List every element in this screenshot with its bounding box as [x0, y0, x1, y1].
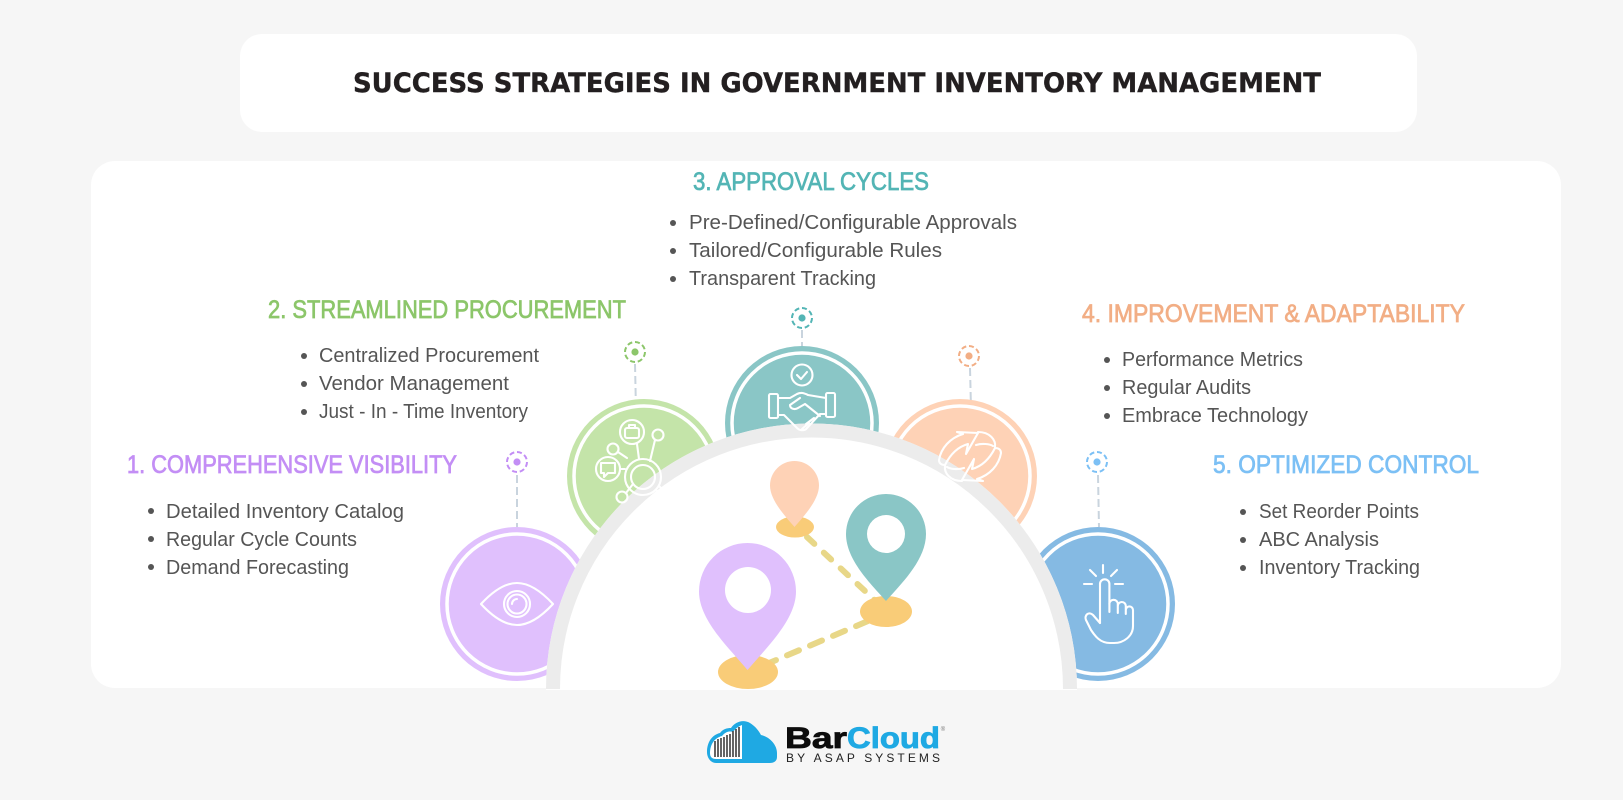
bullet list 1: Detailed Inventory Catalog: [166, 501, 404, 523]
marker: purple target and connector: [507, 452, 527, 527]
bullet list 2: Vendor Management: [319, 373, 509, 395]
bullet list 3: Transparent Tracking: [689, 268, 876, 290]
logo wordmark: Bar: [785, 722, 847, 755]
marker: blue target and connector: [1087, 452, 1107, 527]
icon: refresh arrows: [939, 432, 1001, 481]
logo tagline: BY ASAP SYSTEMS: [786, 751, 940, 765]
main panel background: [91, 161, 1561, 688]
logo: BarCloud: ®: [941, 726, 946, 733]
logo: BarCloud: Cloud: [847, 722, 940, 755]
circle: purple: [440, 527, 594, 681]
bullet list 1: Demand Forecasting: [166, 557, 349, 579]
map pin: purple: [699, 543, 796, 689]
bullet list 3: [670, 212, 1017, 290]
panel: 5 optimized control text: [1213, 451, 1479, 579]
icon: handshake with check: [769, 364, 835, 430]
central dome: [546, 423, 1077, 690]
title: SUCCESS STRATEGIES IN GOVERNMENT INVENTORY MANAGEMENT: [353, 68, 1322, 99]
logo: BarCloud: [707, 721, 946, 765]
bullet list 4: Performance Metrics: [1122, 349, 1303, 371]
marker: green target and connector: [625, 342, 645, 410]
bullet list 5: Inventory Tracking: [1259, 557, 1420, 579]
route dashes: [762, 537, 880, 666]
panel: 4 improvement and adaptability text: [1082, 300, 1465, 427]
panel: 1 comprehensive visibility text: [127, 451, 457, 579]
heading 2: 2. STREAMLINED PROCUREMENT: [268, 296, 626, 324]
bullet list 2: [301, 345, 539, 423]
icon: pointing hand: [1084, 565, 1133, 643]
circle: green: [567, 399, 721, 553]
bullet list 4: Regular Audits: [1122, 377, 1251, 399]
circle: blue: [1021, 527, 1175, 681]
panel: 3 approval cycles text: [670, 168, 1017, 290]
heading 3: 3. APPROVAL CYCLES: [693, 168, 929, 196]
bullet list 5: ABC Analysis: [1259, 529, 1379, 551]
bullet list 3: Tailored/Configurable Rules: [689, 240, 942, 262]
bullet list 5: [1240, 501, 1420, 579]
bullet list 2: Centralized Procurement: [319, 345, 539, 367]
bullet list 2: Just - In - Time Inventory: [319, 401, 528, 423]
circle: teal: [725, 346, 879, 500]
circle: peach: [883, 399, 1037, 553]
heading 1: 1. COMPREHENSIVE VISIBILITY: [127, 451, 457, 479]
bullet list 1: Regular Cycle Counts: [166, 529, 357, 551]
marker: peach target and connector: [959, 346, 979, 408]
marker: teal target and connector: [792, 308, 812, 348]
bullet list 1: [148, 501, 404, 579]
bullet list 4: [1104, 349, 1308, 427]
panel: 2 streamlined procurement text: [268, 296, 626, 423]
map pin: teal: [846, 494, 926, 627]
icon: eye: [481, 583, 553, 625]
title panel: [240, 34, 1417, 132]
map pin: peach: [770, 461, 819, 538]
heading 5: 5. OPTIMIZED CONTROL: [1213, 451, 1479, 479]
bullet list 4: Embrace Technology: [1122, 405, 1308, 427]
icon: network magnifier: [596, 420, 666, 502]
logo cloud: [707, 721, 777, 763]
bullet list 5: Set Reorder Points: [1259, 501, 1419, 523]
bullet list 3: Pre-Defined/Configurable Approvals: [689, 212, 1017, 234]
heading 4: 4. IMPROVEMENT & ADAPTABILITY: [1082, 300, 1465, 328]
